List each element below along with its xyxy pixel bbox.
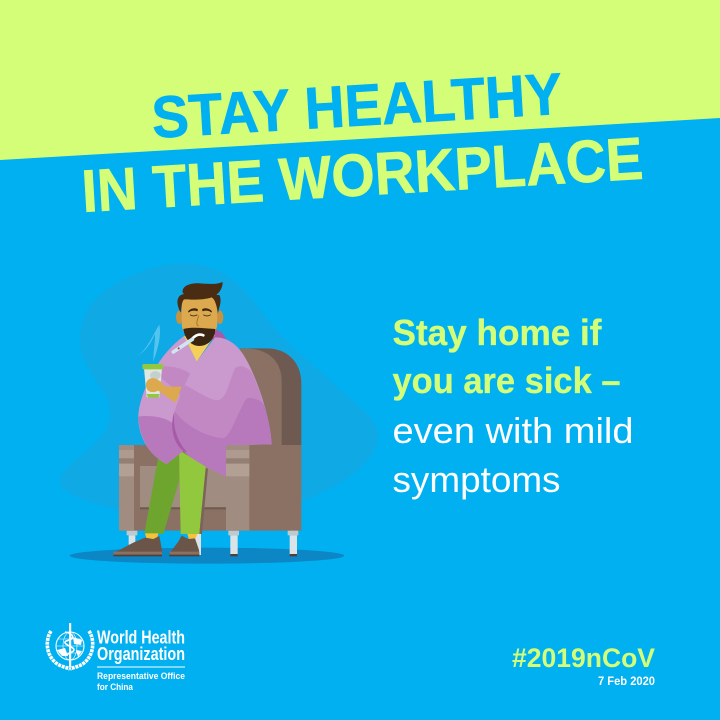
title: STAY HEALTHY xyxy=(150,61,564,151)
organization name: World Health xyxy=(97,628,185,648)
lime diagonal header band xyxy=(0,0,720,160)
cup and hand xyxy=(142,364,182,403)
organization name: Organization xyxy=(97,644,185,664)
organization name: for China xyxy=(97,682,134,692)
title: IN THE WORKPLACE xyxy=(80,125,645,225)
hashtag: #2019nCoV xyxy=(512,643,655,673)
illustration: sick man in armchair xyxy=(60,263,378,564)
shirt collar xyxy=(184,335,215,362)
floor shadow xyxy=(70,548,344,564)
message text: symptoms xyxy=(392,459,560,500)
armchair xyxy=(119,348,301,556)
thermometer xyxy=(173,335,203,352)
message text: even with mild xyxy=(392,410,634,451)
message text: you are sick – xyxy=(392,360,620,401)
organization name: Representative Office xyxy=(97,671,185,681)
message text xyxy=(392,312,634,500)
icon: WHO emblem xyxy=(47,623,93,669)
message text: Stay home if xyxy=(392,312,602,353)
blanket xyxy=(138,329,272,477)
title xyxy=(80,61,645,225)
steam xyxy=(136,325,160,362)
legs and shoes xyxy=(113,450,208,556)
date: 7 Feb 2020 xyxy=(598,676,655,688)
background blob xyxy=(60,263,378,510)
head xyxy=(176,282,223,346)
WHO logo xyxy=(47,623,185,692)
organization name xyxy=(97,628,185,692)
